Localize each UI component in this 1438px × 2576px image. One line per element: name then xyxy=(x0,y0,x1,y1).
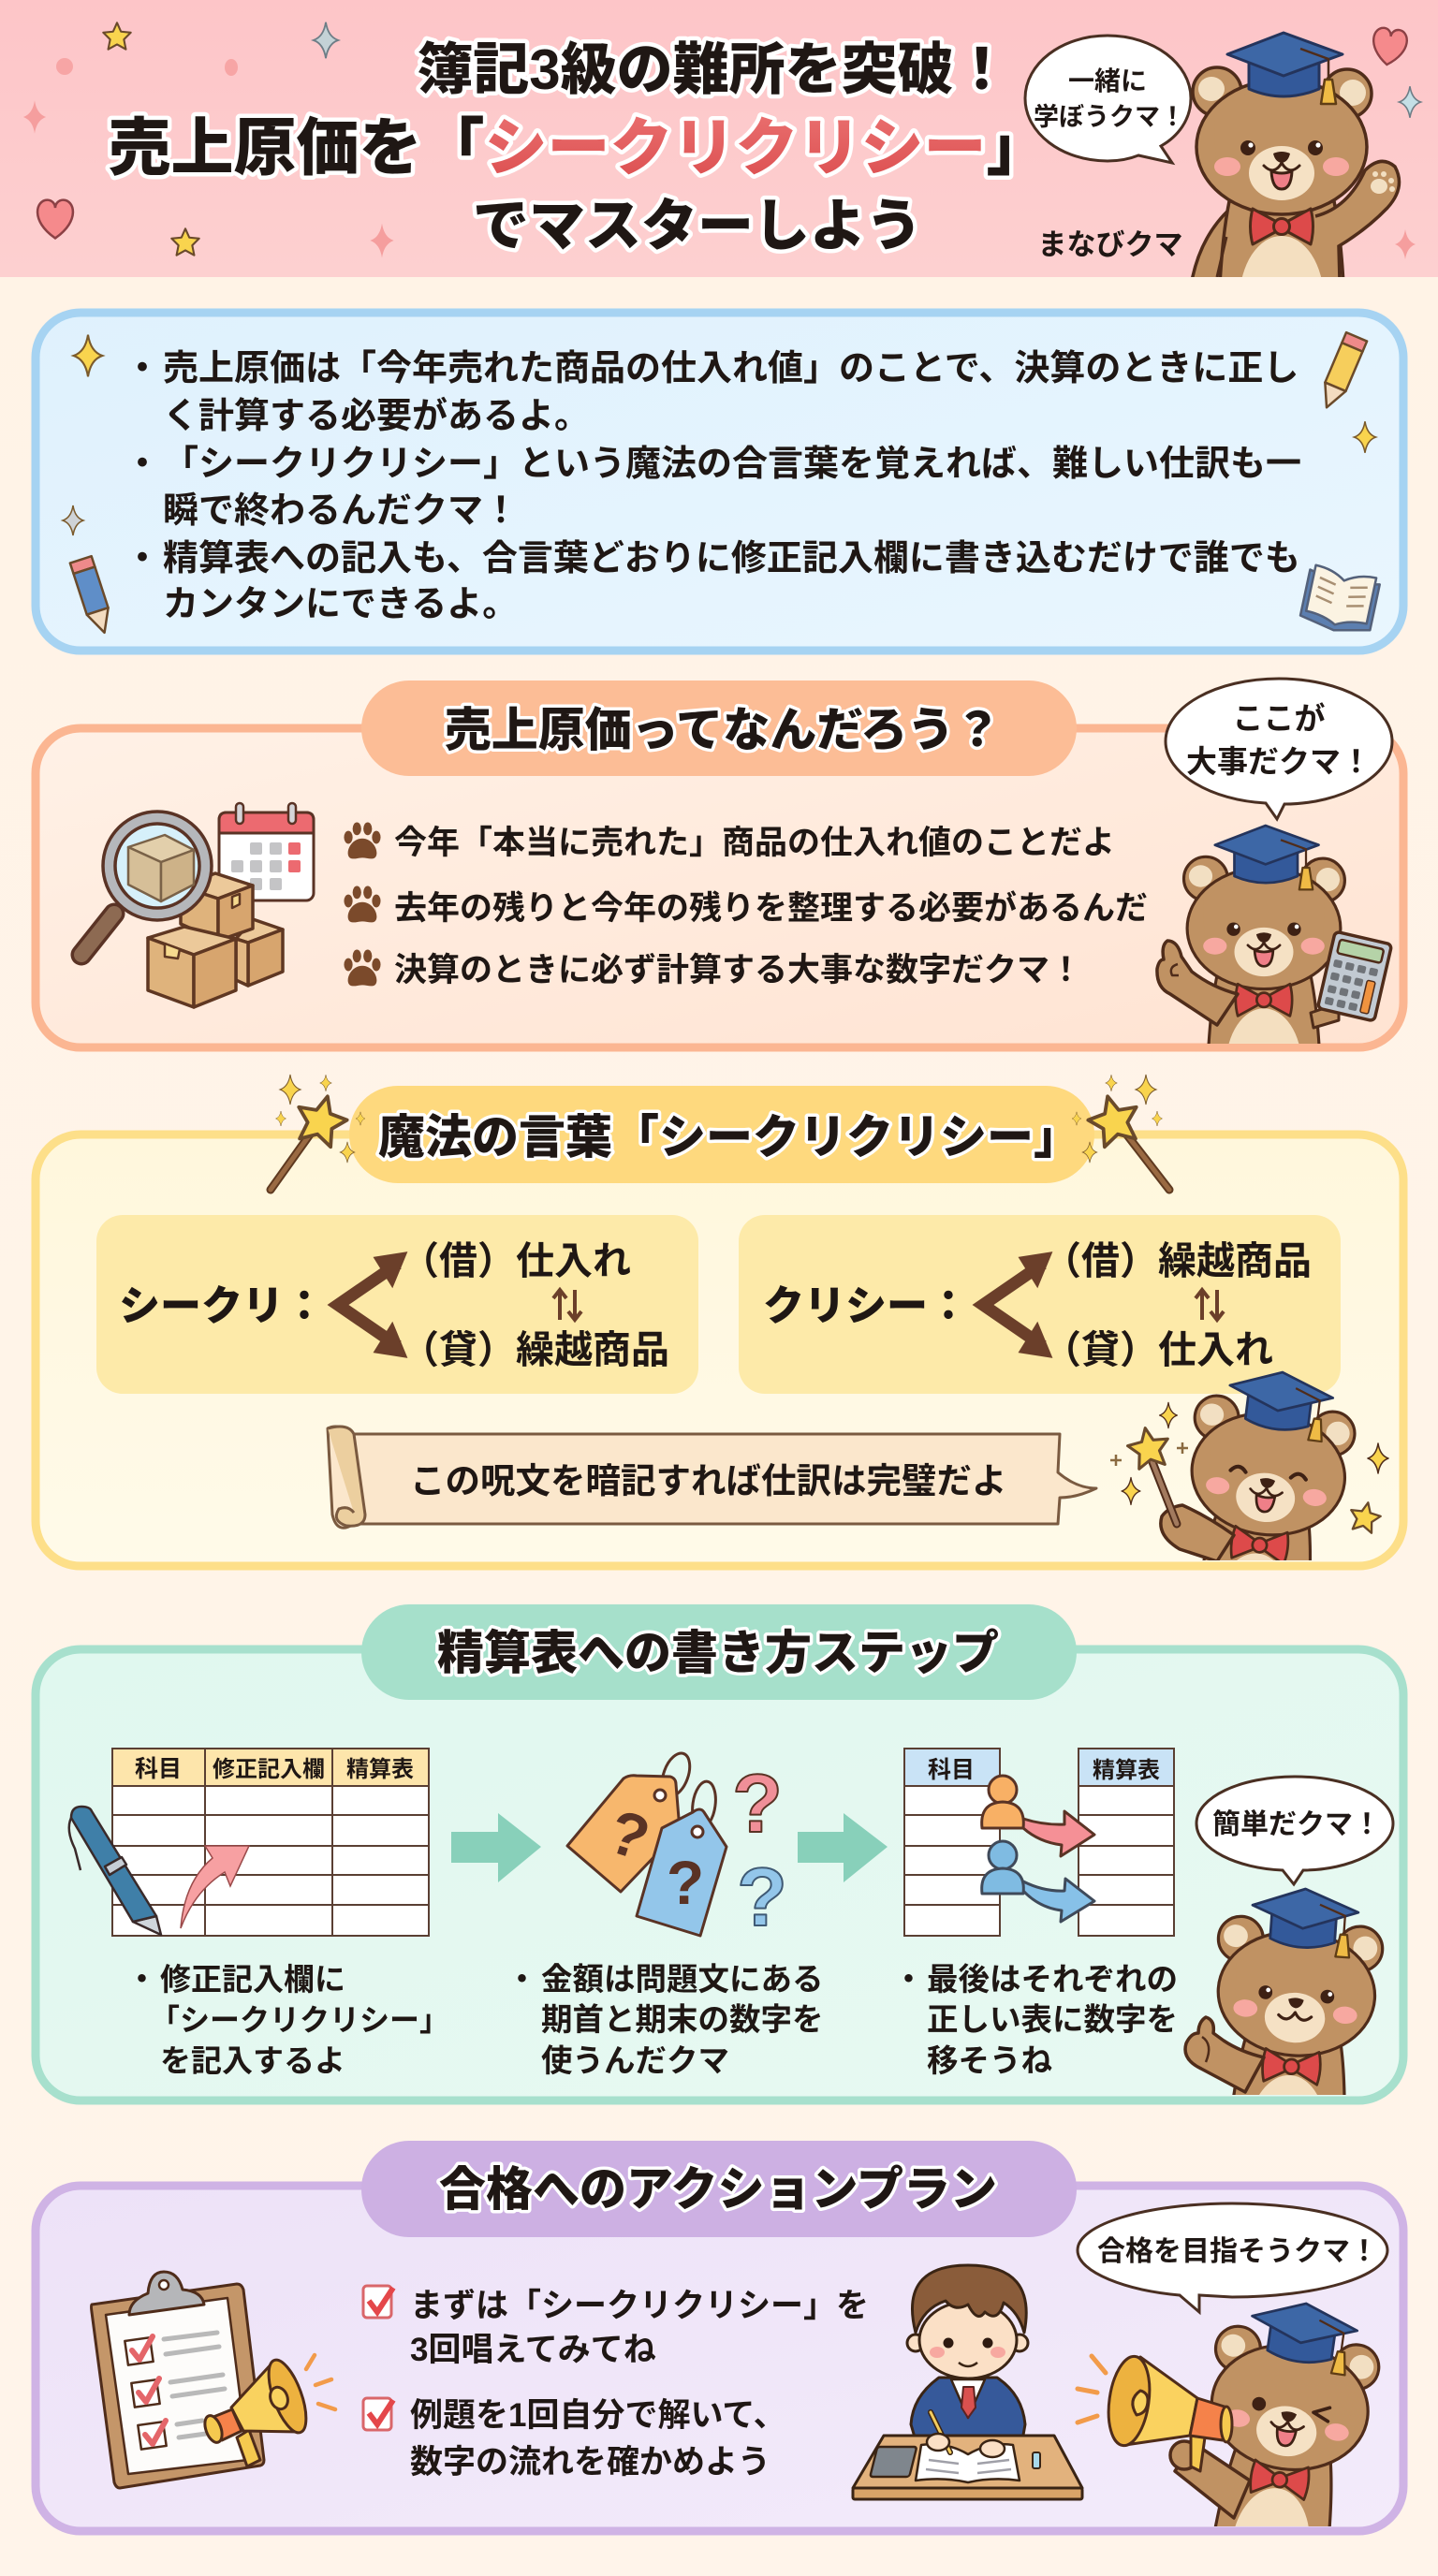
paw bullet 3 xyxy=(344,949,381,986)
speech bubble: 合格を目指そうクマ xyxy=(1078,2203,1387,2312)
summary bullet text: 瞬で終わるんだクマ！ xyxy=(163,491,519,531)
bullet list: 今年「本当に売れた」商品の仕入れ値のことだよ xyxy=(394,825,1115,861)
icon: blue pencil xyxy=(70,556,115,637)
character: pointing bear with calculator xyxy=(1155,824,1393,1044)
card: クリシー: （貸）仕入れ xyxy=(1043,1328,1273,1371)
speech bubble: 合格を目指そうクマ: 合格を目指そうクマ！ xyxy=(1097,2236,1378,2267)
summary bullet text xyxy=(125,349,1301,624)
calculator xyxy=(1317,931,1392,1021)
speech bubble: 簡単だクマ xyxy=(1196,1777,1393,1884)
step 1 text: 「シークリクリシー」 xyxy=(150,2003,449,2037)
card: クリシー: （借）繰越商品 xyxy=(1043,1239,1312,1282)
icon: clipboard checklist xyxy=(92,2272,264,2488)
title xyxy=(109,38,1049,257)
summary bullet text: 精算表への記入も、合言葉どおりに修正記入欄に書き込むだけで誰でも xyxy=(163,539,1300,578)
heading pill xyxy=(361,681,1077,776)
calendar xyxy=(219,803,314,900)
arrows: debit credit split xyxy=(983,1264,1043,1346)
character: thumbs up bear xyxy=(1185,1883,1387,2198)
bullet list xyxy=(344,822,1148,988)
arrows: swap xyxy=(553,1290,581,1320)
title: 売上原価を「シークリクリシー」 xyxy=(109,113,1049,183)
illustration: magnifier calendar boxes xyxy=(81,803,314,1007)
label: まなびクマ: まなびクマ xyxy=(1037,228,1183,261)
paw bullet 2 xyxy=(344,886,381,922)
heading pill: 魔法の言葉「シークリクリシー」 xyxy=(378,1111,1080,1164)
checklist item 1 xyxy=(363,2286,869,2368)
speech bubble: 簡単だクマ: 簡単だクマ！ xyxy=(1212,1809,1381,1840)
bullet list: 去年の残りと今年の残りを整理する必要があるんだ xyxy=(394,890,1148,927)
summary bullet text: ・ xyxy=(125,539,160,578)
scroll callout: この呪文を暗記すれば仕訳は完璧だよ xyxy=(410,1461,1007,1500)
step 1 text xyxy=(126,1962,449,2078)
icon: left wand xyxy=(271,1075,365,1190)
checklist item 1: 3回唱えてみてね xyxy=(410,2332,656,2368)
icon: question tags: ? xyxy=(600,1796,658,1873)
step 1 text: を記入するよ xyxy=(160,2043,345,2078)
step 3 tables: 精算表 xyxy=(1093,1758,1160,1783)
card: シークリ xyxy=(96,1215,698,1394)
summary bullet text: く計算する必要があるよ。 xyxy=(163,397,590,436)
title: でマスターしよう xyxy=(473,195,922,257)
step 2 text: 金額は問題文にある xyxy=(541,1963,824,1998)
icon: blue person with arrow xyxy=(982,1841,1094,1922)
step 2 text: ・ xyxy=(506,1962,537,1997)
card: クリシー: クリシー： xyxy=(763,1283,969,1329)
speech bubble: 一緒に学ぼうクマ: 学ぼうクマ！ xyxy=(1034,103,1185,131)
step 3 text: 正しい表に数字を xyxy=(927,2003,1178,2038)
character: header bear xyxy=(1191,32,1401,277)
arrow: step 2 to 3 xyxy=(798,1813,888,1882)
scroll callout xyxy=(328,1427,1096,1528)
step 3 tables xyxy=(904,1749,1174,1936)
character: studying boy xyxy=(853,2265,1082,2499)
icon: question tags: ? xyxy=(737,1851,787,1943)
card: シークリ: （借）仕入れ xyxy=(401,1239,631,1282)
heading pill: 合格へのアクションプラン xyxy=(439,2163,997,2216)
panel: summary xyxy=(36,313,1403,651)
heading pill xyxy=(361,2141,1077,2237)
step 3 text: 移そうね xyxy=(927,2044,1052,2079)
card: クリシー xyxy=(739,1215,1341,1394)
character: bear with wand xyxy=(1110,1370,1389,1560)
header banner xyxy=(0,0,1438,277)
icon: right wand xyxy=(1072,1075,1169,1190)
icon: orange person with arrow xyxy=(982,1776,1094,1856)
speech bubble: ここが大事だクマ xyxy=(1166,679,1392,819)
icon: blue pen xyxy=(69,1807,161,1935)
paw bullet 1 xyxy=(344,822,381,858)
step 1 text: ・ xyxy=(126,1962,157,1997)
heading pill xyxy=(349,1086,1094,1183)
step 2 text xyxy=(506,1962,824,2079)
icon: question tags: ? xyxy=(732,1757,783,1850)
summary bullet text: 売上原価は「今年売れた商品の仕入れ値」のことで、決算のときに正し xyxy=(163,349,1299,388)
step 3 text xyxy=(893,1962,1178,2079)
step 2 text: 期首と期末の数字を xyxy=(541,2003,824,2038)
summary bullet text: ・ xyxy=(125,349,160,388)
step 3 text: 最後はそれぞれの xyxy=(927,1963,1178,1998)
step 1 table: 精算表 xyxy=(346,1757,414,1782)
icon: sparkles xyxy=(63,335,1376,535)
speech bubble: 一緒に学ぼうクマ: 一緒に xyxy=(1068,66,1147,95)
card: シークリ: （貸）繰越商品 xyxy=(401,1328,669,1371)
cardboard boxes xyxy=(148,873,283,1007)
bullet list: 決算のときに必ず計算する大事な数字だクマ！ xyxy=(394,952,1082,988)
magnifier xyxy=(81,812,212,955)
checklist item 2: 例題を1回自分で解いて、 xyxy=(410,2397,786,2434)
icon: open book xyxy=(1299,564,1381,637)
icon: red curved arrow xyxy=(181,1846,249,1928)
arrows: debit credit split xyxy=(338,1264,398,1346)
heading pill: 精算表への書き方ステップ xyxy=(437,1627,999,1679)
heading pill: 売上原価ってなんだろう？ xyxy=(445,704,1001,756)
icon: yellow pencil xyxy=(1316,332,1367,412)
arrow: step 1 to 2 xyxy=(451,1813,541,1882)
speech bubble: ここが大事だクマ: 大事だクマ！ xyxy=(1186,744,1372,779)
step 3 text: ・ xyxy=(893,1962,924,1997)
panel: what is cost of sales xyxy=(32,678,1408,1052)
arrows: swap xyxy=(1196,1290,1224,1320)
speech bubble: 一緒に学ぼうクマ xyxy=(1025,36,1191,163)
step 3 tables: 科目 xyxy=(928,1757,975,1783)
checklist item 2 xyxy=(363,2397,786,2481)
heading pill xyxy=(361,1604,1077,1700)
card: シークリ: シークリ： xyxy=(119,1283,325,1329)
header decorations xyxy=(23,22,1421,259)
panel: magic words xyxy=(32,1075,1408,1571)
icon: large megaphone xyxy=(1078,2354,1232,2471)
character: bear with megaphone xyxy=(1170,2292,1387,2576)
title: 簿記3級の難所を突破！ xyxy=(417,38,1010,101)
icon: question tags xyxy=(567,1749,787,1943)
panel: action plan xyxy=(36,2141,1403,2576)
summary bullet text: ・ xyxy=(125,445,160,484)
step 1 table: 科目 xyxy=(135,1756,182,1782)
summary bullet text: カンタンにできるよ。 xyxy=(163,585,518,624)
step 1 table: 修正記入欄 xyxy=(213,1757,325,1782)
step 1 text: 修正記入欄に xyxy=(160,1962,345,1997)
icon: question tags: ? xyxy=(667,1848,704,1917)
icon: small megaphone xyxy=(201,2355,335,2466)
checklist item 2: 数字の流れを確かめよう xyxy=(410,2444,770,2481)
checklist item 1: まずは「シークリクリシー」を xyxy=(410,2288,869,2324)
panel: worksheet steps xyxy=(32,1604,1408,2104)
step 1 table xyxy=(112,1749,429,1936)
summary bullet text: 「シークリクリシー」という魔法の合言葉を覚えれば、難しい仕訳も一 xyxy=(163,445,1301,484)
step 2 text: 使うんだクマ xyxy=(541,2044,729,2079)
speech bubble: ここが大事だクマ: ここが xyxy=(1232,701,1326,736)
